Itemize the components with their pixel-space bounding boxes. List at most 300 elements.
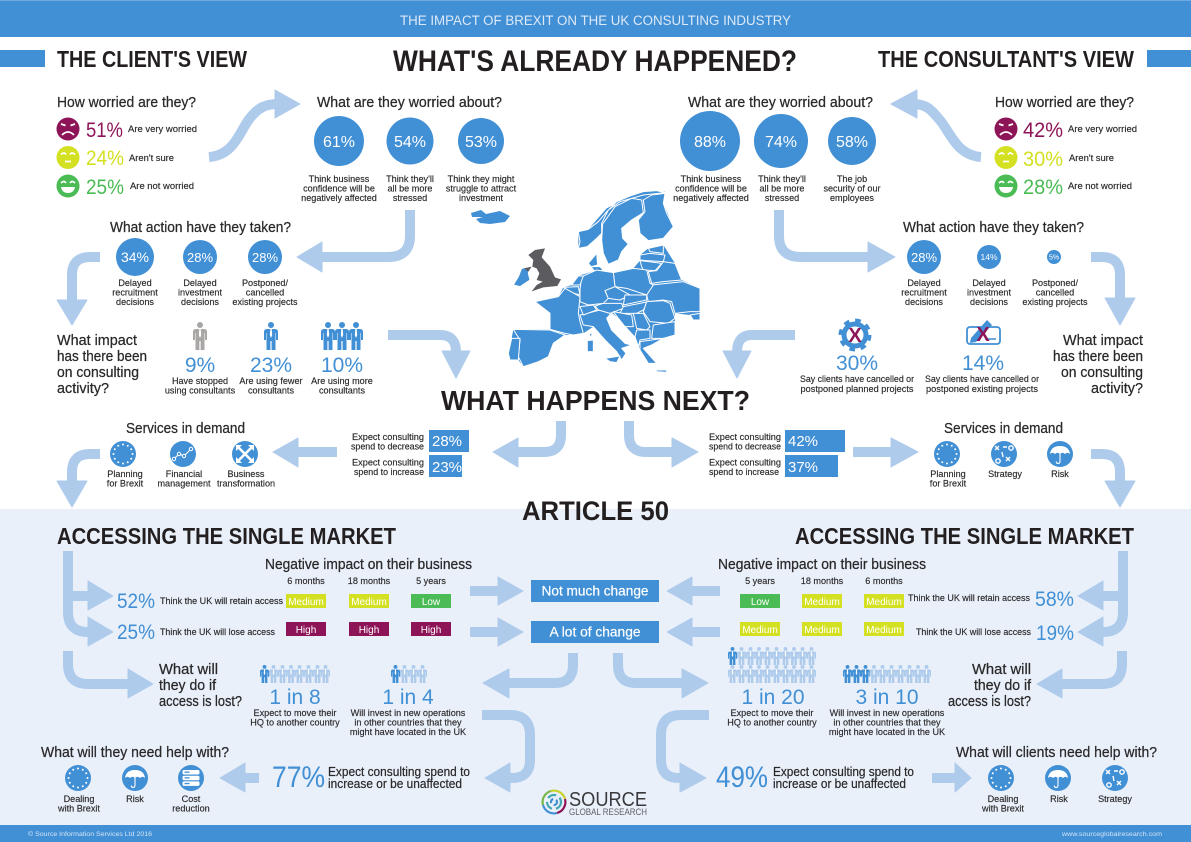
arrow: consultant worried to about bbox=[891, 90, 981, 157]
label: security of our bbox=[823, 184, 881, 194]
stat 3 in 10: 3 in 10 bbox=[855, 686, 919, 709]
circle 28% bbox=[248, 240, 282, 274]
arrows into not much change bbox=[470, 577, 720, 605]
heading: the consultant's view: THE CONSULTANT'S VIEW bbox=[878, 46, 1134, 72]
arrow: consultant about to action bbox=[779, 210, 895, 272]
bar 37%: 37% bbox=[788, 459, 818, 476]
circle 28%: 28% bbox=[252, 250, 278, 265]
label: stressed bbox=[765, 193, 799, 203]
label: investment bbox=[967, 288, 1011, 298]
icon: document with cross: X bbox=[976, 324, 990, 346]
stat 24%: 24% bbox=[86, 147, 124, 170]
label bbox=[709, 432, 781, 477]
label bbox=[165, 376, 236, 396]
icon: 1 in 20 people bbox=[728, 647, 816, 683]
circle 54%: 54% bbox=[394, 134, 426, 151]
circle 34% bbox=[116, 238, 154, 276]
arrow: right down to 49% bbox=[661, 715, 709, 792]
arrow: to client services bbox=[273, 438, 337, 467]
label: HQ to another country bbox=[250, 718, 340, 728]
arrow: right lower branch bbox=[1037, 651, 1122, 698]
stat 30%: 30% bbox=[1023, 148, 1063, 171]
circle 54% bbox=[386, 118, 434, 164]
label: Think the UK will lose access bbox=[160, 627, 275, 637]
circle 34%: 34% bbox=[121, 249, 149, 265]
arrows into a lot of change bbox=[470, 618, 720, 646]
label: Expect to move their bbox=[731, 708, 813, 718]
heading: they do if bbox=[159, 677, 217, 694]
header bar: THE IMPACT OF BREXIT ON THE UK CONSULTING INDUSTRY bbox=[400, 13, 791, 28]
arrow: consultant services down bbox=[1091, 454, 1135, 507]
circle 88% bbox=[680, 111, 740, 171]
icon: gear with cross bbox=[840, 320, 870, 350]
icon: risk bbox=[1047, 441, 1073, 467]
circle 5%: 5% bbox=[1049, 254, 1059, 262]
icon: not sure face bbox=[994, 146, 1018, 169]
label: Planning bbox=[930, 469, 966, 479]
label: Business bbox=[228, 469, 265, 479]
tags: High bbox=[421, 625, 441, 636]
label bbox=[311, 376, 373, 396]
arrow: left down to 77% bbox=[482, 715, 530, 792]
panel: consultant if access lost bbox=[727, 647, 1032, 737]
icon: not worried face bbox=[994, 174, 1018, 198]
box: a lot of change bbox=[531, 621, 659, 643]
icon: risk bbox=[1045, 765, 1071, 791]
arrow: right branches bbox=[1078, 551, 1123, 646]
label: in other countries that they bbox=[833, 718, 941, 728]
label: Are not worried bbox=[1068, 181, 1132, 191]
text bbox=[328, 765, 470, 791]
label bbox=[112, 278, 158, 307]
heading: What action have they taken? bbox=[903, 219, 1084, 236]
label: investment bbox=[178, 288, 222, 298]
panel: consultant help bbox=[956, 744, 1157, 814]
label bbox=[829, 708, 945, 737]
heading: has there been bbox=[1053, 348, 1143, 365]
label: decisions bbox=[905, 297, 943, 307]
label: Think business bbox=[309, 174, 370, 184]
heading: access is lost? bbox=[159, 693, 242, 710]
icon: eu bbox=[65, 765, 91, 791]
stat 25%: 25% bbox=[86, 176, 124, 199]
bottom panel background bbox=[0, 509, 1191, 825]
panel: client negative impact bbox=[117, 556, 472, 644]
label: Risk bbox=[126, 794, 144, 804]
label: investment bbox=[459, 193, 503, 203]
icon: 1 in 4 people bbox=[391, 665, 427, 683]
icon: eu bbox=[988, 765, 1014, 791]
label: Will invest in new operations bbox=[830, 708, 945, 718]
label: Dealing bbox=[988, 794, 1018, 804]
icon: document with cross bbox=[967, 320, 1000, 346]
label: spend to decrease bbox=[351, 442, 424, 452]
label: existing projects bbox=[1022, 297, 1088, 307]
label: Say clients have cancelled or bbox=[925, 374, 1039, 384]
panel: client if access lost bbox=[159, 661, 466, 737]
panel: client services bbox=[107, 420, 275, 488]
icon: 1 in 8 people bbox=[260, 665, 330, 683]
stat 49%: 49% bbox=[716, 761, 768, 794]
heading: right single market: ACCESSING THE SINGLE MARKET bbox=[795, 523, 1134, 549]
icon: blue person bbox=[264, 322, 278, 350]
heading bbox=[57, 332, 147, 397]
arrow: to consultant help bbox=[932, 763, 971, 792]
logo: source global research: SOURCE bbox=[569, 789, 647, 811]
heading bbox=[159, 661, 242, 710]
label: Think the UK will lose access bbox=[916, 627, 1031, 637]
stat 77%: 77% bbox=[272, 761, 325, 794]
heading: they do if bbox=[974, 677, 1032, 694]
label: Think they'll bbox=[758, 174, 806, 184]
arrow: consultant action to impact bbox=[1091, 257, 1135, 325]
label: Think the UK will retain access bbox=[160, 596, 284, 606]
arrow: next to left spend bbox=[493, 421, 561, 467]
panel: consultant spend bars bbox=[709, 430, 845, 477]
circle 74%: 74% bbox=[765, 134, 797, 151]
tags: Medium bbox=[804, 625, 840, 636]
heading: has there been bbox=[57, 348, 147, 365]
label: consultants bbox=[248, 386, 294, 396]
panel: client spend bars bbox=[351, 430, 469, 477]
heading: What will bbox=[972, 661, 1031, 678]
arrow: right into next bbox=[723, 335, 795, 378]
tags: Low bbox=[422, 597, 441, 608]
stat 9%: 9% bbox=[185, 354, 215, 377]
box: not much change bbox=[531, 580, 659, 602]
label: Postponed/ bbox=[1032, 278, 1078, 288]
icon: not sure face bbox=[56, 146, 80, 169]
label: Expect consulting bbox=[709, 432, 781, 442]
icon: risk bbox=[122, 765, 148, 791]
circle 53%: 53% bbox=[465, 134, 497, 151]
tags: Medium bbox=[804, 597, 840, 608]
right heading bar bbox=[1147, 50, 1191, 67]
label: spend to increase bbox=[709, 467, 779, 477]
label: Are using more bbox=[311, 376, 373, 386]
label: Aren't sure bbox=[129, 153, 174, 163]
heading: Services in demand bbox=[944, 420, 1063, 437]
circle 53% bbox=[458, 118, 504, 164]
label: confidence will be bbox=[303, 184, 375, 194]
column labels bbox=[745, 576, 903, 586]
label: Strategy bbox=[988, 469, 1022, 479]
label: spend to increase bbox=[354, 467, 424, 477]
label: Expect to move their bbox=[254, 708, 336, 718]
label: Have stopped bbox=[172, 376, 228, 386]
label bbox=[1022, 278, 1088, 307]
label bbox=[250, 708, 340, 728]
tags: High bbox=[359, 625, 379, 636]
label: confidence will be bbox=[675, 184, 747, 194]
arrow: change to left bbox=[483, 653, 573, 698]
circle 61% bbox=[314, 116, 364, 166]
circle 28%: 28% bbox=[911, 250, 937, 265]
label bbox=[925, 374, 1039, 394]
column labels: 5 years bbox=[416, 576, 446, 586]
heading: What action have they taken? bbox=[110, 219, 291, 236]
label: Financial bbox=[166, 469, 202, 479]
column labels: 6 months bbox=[287, 576, 325, 586]
icon: finance bbox=[170, 441, 196, 467]
tags: Medium bbox=[866, 597, 902, 608]
arrow: left branches bbox=[68, 551, 113, 646]
icon: very worried face bbox=[56, 118, 80, 140]
heading: Negative impact on their business bbox=[718, 556, 926, 573]
label: Postponed/ bbox=[242, 278, 288, 288]
icon: three people bbox=[321, 322, 363, 350]
title: what happens next: WHAT HAPPENS NEXT? bbox=[441, 385, 750, 416]
bar 23%: 23% bbox=[432, 459, 462, 476]
label: cancelled bbox=[1036, 288, 1074, 298]
title: what's already happened: WHAT'S ALREADY HAPPENED? bbox=[393, 45, 797, 78]
label: spend to decrease bbox=[709, 442, 781, 452]
heading: What will bbox=[159, 661, 218, 678]
column labels: 6 months bbox=[865, 576, 903, 586]
label: Expect consulting bbox=[352, 458, 424, 468]
label: Are not worried bbox=[130, 181, 194, 191]
label bbox=[157, 469, 211, 488]
label: Dealing bbox=[64, 794, 94, 804]
label: Think they'll bbox=[386, 174, 434, 184]
label: might have located in the UK bbox=[829, 727, 945, 737]
arrow: left lower branch bbox=[68, 651, 153, 698]
arrow: to consultant services bbox=[853, 438, 918, 467]
stat 30%: 30% bbox=[836, 352, 878, 375]
label: Think they might bbox=[448, 174, 515, 184]
label: Delayed bbox=[972, 278, 1006, 288]
circle 28% bbox=[907, 240, 941, 274]
label: recruitment bbox=[901, 288, 947, 298]
text: increase or be unaffected bbox=[328, 777, 462, 791]
heading: Negative impact on their business bbox=[265, 556, 472, 573]
icon: gear with cross: X bbox=[848, 325, 862, 347]
label: decisions bbox=[181, 297, 219, 307]
arrow: next to right spend bbox=[629, 421, 698, 467]
label: decisions bbox=[116, 297, 154, 307]
label: HQ to another country bbox=[727, 718, 817, 728]
column labels: 18 months bbox=[348, 576, 391, 586]
stat 28%: 28% bbox=[1023, 176, 1063, 199]
label: for Brexit bbox=[107, 478, 144, 488]
column labels: 18 months bbox=[801, 576, 844, 586]
label: Delayed bbox=[907, 278, 941, 288]
icon: not worried face bbox=[56, 174, 80, 198]
label: decisions bbox=[970, 297, 1008, 307]
stat 1 in 20: 1 in 20 bbox=[741, 686, 805, 709]
circle 14%: 14% bbox=[980, 252, 998, 262]
panel: consultant worried about bbox=[673, 94, 881, 203]
label: existing projects bbox=[232, 297, 298, 307]
box: not much change: Not much change bbox=[542, 584, 648, 598]
label: recruitment bbox=[112, 288, 158, 298]
footer: © Source Information Services Ltd 2016 bbox=[28, 830, 152, 838]
map: iceland bbox=[471, 210, 510, 224]
arrow: to client help bbox=[220, 763, 259, 792]
label bbox=[232, 278, 298, 307]
arrow: about to action bbox=[297, 210, 410, 272]
tags: High bbox=[296, 625, 316, 636]
heading: How worried are they? bbox=[57, 94, 196, 111]
panel: client how worried bbox=[56, 94, 197, 199]
label bbox=[981, 794, 1024, 814]
tags bbox=[286, 594, 451, 636]
title: article 50: ARTICLE 50 bbox=[522, 496, 669, 526]
label: Delayed bbox=[183, 278, 217, 288]
tags: Medium bbox=[351, 597, 387, 608]
icon: strategy bbox=[991, 441, 1017, 467]
tags: Medium bbox=[742, 625, 778, 636]
label bbox=[172, 794, 210, 814]
map of europe bbox=[508, 191, 700, 372]
label: with Brexit bbox=[981, 804, 1024, 814]
heading: How worried are they? bbox=[995, 94, 1134, 111]
label: might have located in the UK bbox=[350, 727, 466, 737]
arrow: action to impact bbox=[57, 257, 100, 325]
label: Are very worried bbox=[128, 124, 197, 134]
circle 14% bbox=[977, 245, 1001, 269]
label bbox=[107, 469, 144, 488]
bar 42%: 42% bbox=[788, 433, 818, 450]
label: Think business bbox=[681, 174, 742, 184]
label: Say clients have cancelled or bbox=[800, 374, 914, 384]
label bbox=[217, 469, 275, 488]
heading: What impact bbox=[57, 332, 138, 349]
tags bbox=[740, 594, 904, 636]
label: Are using fewer bbox=[239, 376, 303, 386]
label: stressed bbox=[393, 193, 427, 203]
heading bbox=[1053, 332, 1144, 397]
footer bbox=[0, 825, 1191, 842]
label: for Brexit bbox=[930, 478, 967, 488]
label: Planning bbox=[107, 469, 143, 479]
label: Expect consulting bbox=[709, 458, 781, 468]
circle 74% bbox=[754, 114, 808, 168]
label: negatively affected bbox=[301, 193, 377, 203]
panel: consultant action taken bbox=[901, 219, 1088, 307]
panel: client action taken bbox=[110, 219, 298, 307]
panel: consultant services bbox=[930, 420, 1073, 488]
label bbox=[673, 174, 749, 203]
label: Risk bbox=[1050, 794, 1068, 804]
icon: 3 in 10 people bbox=[843, 665, 931, 683]
label bbox=[823, 174, 881, 203]
label bbox=[178, 278, 222, 307]
box: a lot of change: A lot of change bbox=[550, 624, 640, 640]
label bbox=[239, 376, 303, 396]
stat 23%: 23% bbox=[250, 354, 292, 377]
label: in other countries that they bbox=[354, 718, 462, 728]
label: Are very worried bbox=[1068, 124, 1137, 134]
circle 58% bbox=[828, 117, 876, 165]
stat 1 in 4: 1 in 4 bbox=[382, 686, 434, 709]
label bbox=[351, 432, 424, 477]
label bbox=[800, 374, 914, 394]
stat 1 in 8: 1 in 8 bbox=[269, 686, 321, 709]
label bbox=[350, 708, 466, 737]
icon: cost bbox=[178, 765, 204, 791]
panel: consultant negative impact bbox=[718, 556, 1074, 645]
circle 61%: 61% bbox=[323, 134, 355, 151]
arrow: client services down bbox=[57, 454, 100, 507]
label: Cost bbox=[182, 794, 201, 804]
text: Expect consulting spend to bbox=[328, 765, 470, 779]
label: using consultants bbox=[165, 386, 236, 396]
label: Think the UK will retain access bbox=[908, 593, 1030, 603]
label: Aren't sure bbox=[1069, 153, 1114, 163]
footer: www.sourceglobalresearch.com bbox=[1061, 831, 1162, 838]
label: cancelled bbox=[246, 288, 284, 298]
logo: source global research bbox=[543, 789, 647, 818]
heading: on consulting bbox=[1061, 364, 1143, 381]
icon: very worried face bbox=[994, 118, 1018, 140]
icon: transformation bbox=[232, 441, 258, 467]
heading: What are they worried about? bbox=[317, 94, 502, 111]
label: Expect consulting bbox=[352, 432, 424, 442]
icon: strategy bbox=[1102, 765, 1128, 791]
label: Risk bbox=[1051, 469, 1069, 479]
label bbox=[446, 174, 517, 203]
label: struggle to attract bbox=[446, 184, 517, 194]
panel: consultant how worried bbox=[994, 94, 1137, 199]
label: Will invest in new operations bbox=[351, 708, 466, 718]
stat 58%: 58% bbox=[1035, 588, 1074, 611]
label: Strategy bbox=[1098, 794, 1132, 804]
stat 52%: 52% bbox=[117, 590, 155, 613]
label bbox=[901, 278, 947, 307]
label: Delayed bbox=[118, 278, 152, 288]
heading: activity? bbox=[57, 380, 109, 397]
heading: access is lost? bbox=[948, 693, 1031, 710]
circle 5% bbox=[1047, 250, 1061, 264]
heading: What will they need help with? bbox=[41, 744, 229, 761]
tags: Low bbox=[751, 597, 770, 608]
circle 88%: 88% bbox=[694, 134, 726, 151]
label: with Brexit bbox=[57, 804, 100, 814]
logo: source global research: GLOBAL RESEARCH bbox=[569, 807, 647, 818]
left heading bar bbox=[0, 50, 45, 67]
heading: What impact bbox=[1063, 332, 1144, 349]
icon: grey person bbox=[193, 322, 207, 350]
circle 58%: 58% bbox=[836, 134, 868, 151]
arrow: left into next bbox=[388, 335, 470, 378]
label: consultants bbox=[319, 386, 365, 396]
label bbox=[57, 794, 100, 814]
label: all be more bbox=[760, 184, 804, 194]
heading: Services in demand bbox=[126, 420, 245, 437]
heading: left single market: ACCESSING THE SINGLE MARKET bbox=[57, 523, 396, 549]
label: negatively affected bbox=[673, 193, 749, 203]
label: postponed planned projects bbox=[800, 384, 914, 394]
panel: client worried about bbox=[301, 94, 517, 203]
heading: What are they worried about? bbox=[688, 94, 873, 111]
circle 28%: 28% bbox=[187, 250, 213, 265]
text bbox=[773, 765, 914, 791]
tags: Medium bbox=[866, 625, 902, 636]
bar 28%: 28% bbox=[432, 433, 462, 450]
label bbox=[386, 174, 434, 203]
label: employees bbox=[830, 193, 874, 203]
heading: on consulting bbox=[57, 364, 139, 381]
label: transformation bbox=[217, 478, 275, 488]
label: all be more bbox=[388, 184, 432, 194]
stat 25%: 25% bbox=[117, 621, 155, 644]
label bbox=[930, 469, 967, 488]
label bbox=[758, 174, 806, 203]
heading: What will clients need help with? bbox=[956, 744, 1157, 761]
text: Expect consulting spend to bbox=[773, 765, 914, 779]
label: postponed existing projects bbox=[926, 384, 1038, 394]
